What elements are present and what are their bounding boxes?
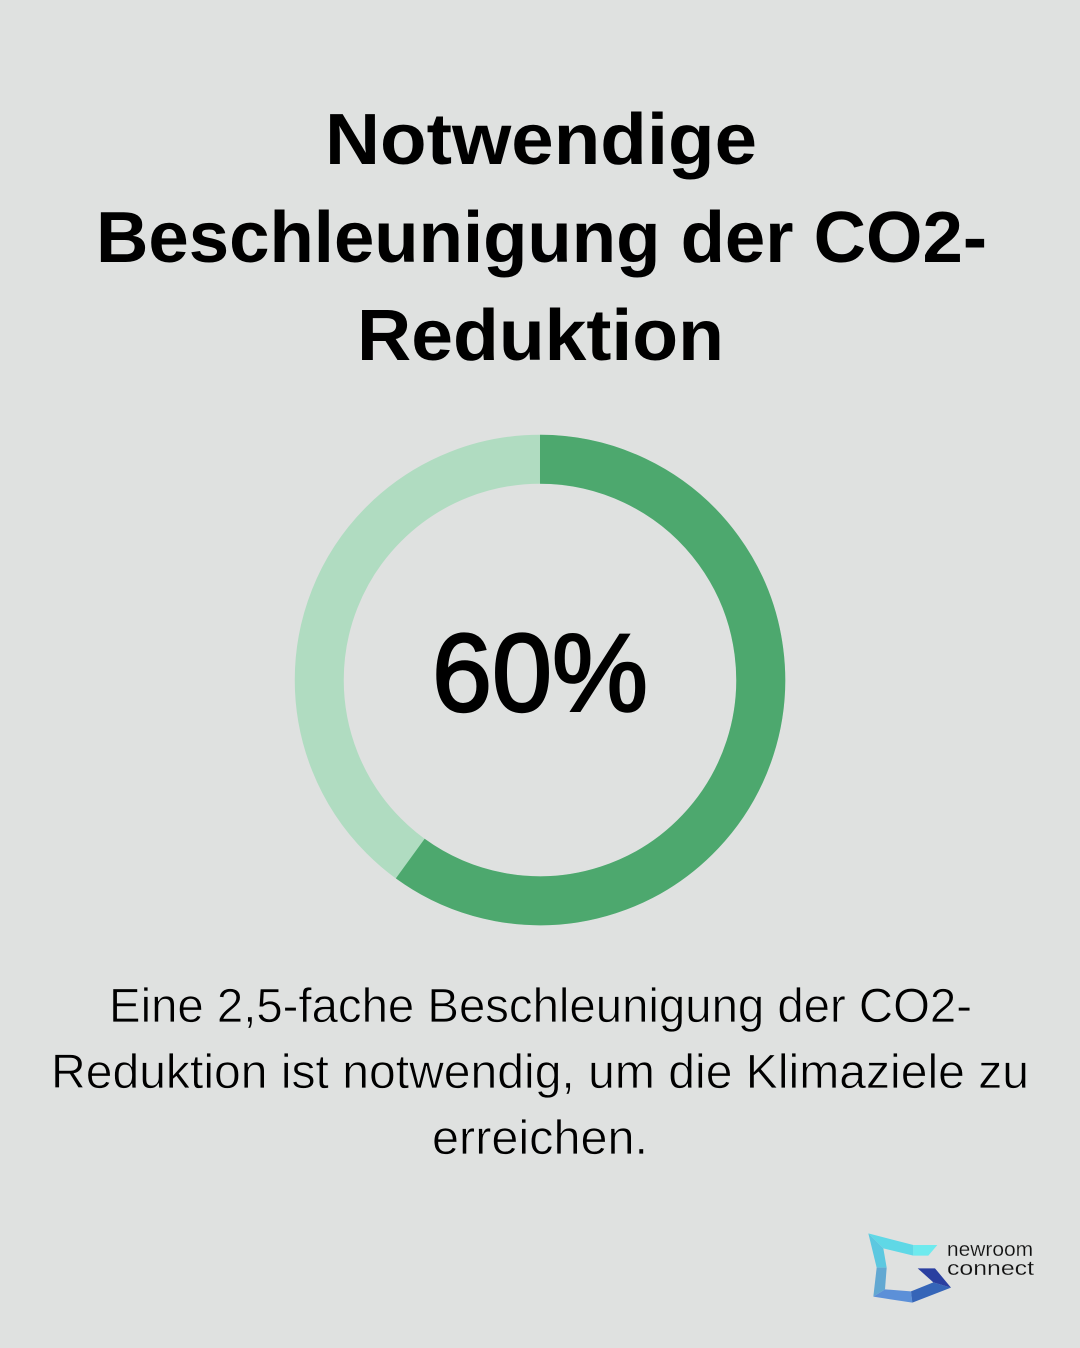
logo wordmark: connect <box>947 1258 1035 1280</box>
title <box>96 100 987 376</box>
chart segment: 60% <box>410 459 761 901</box>
title: Beschleunigung der CO2- <box>96 198 987 278</box>
description text <box>51 980 1029 1165</box>
donut value: 60% <box>432 612 648 735</box>
donut chart: 60% <box>319 459 761 901</box>
title: Reduktion <box>357 296 724 376</box>
logo wordmark <box>947 1239 1035 1280</box>
description text: Eine 2,5-fache Beschleunigung der CO2- <box>109 980 972 1033</box>
title: Notwendige <box>325 100 757 180</box>
chart track: remaining 40% <box>319 459 761 901</box>
logo wordmark: newroom <box>947 1239 1033 1261</box>
logo: newroom connect <box>868 1233 1035 1303</box>
description text: erreichen. <box>432 1112 648 1165</box>
description text: Reduktion ist notwendig, um die Klimaziele zu <box>51 1046 1029 1099</box>
icon: logo mark <box>868 1233 951 1303</box>
